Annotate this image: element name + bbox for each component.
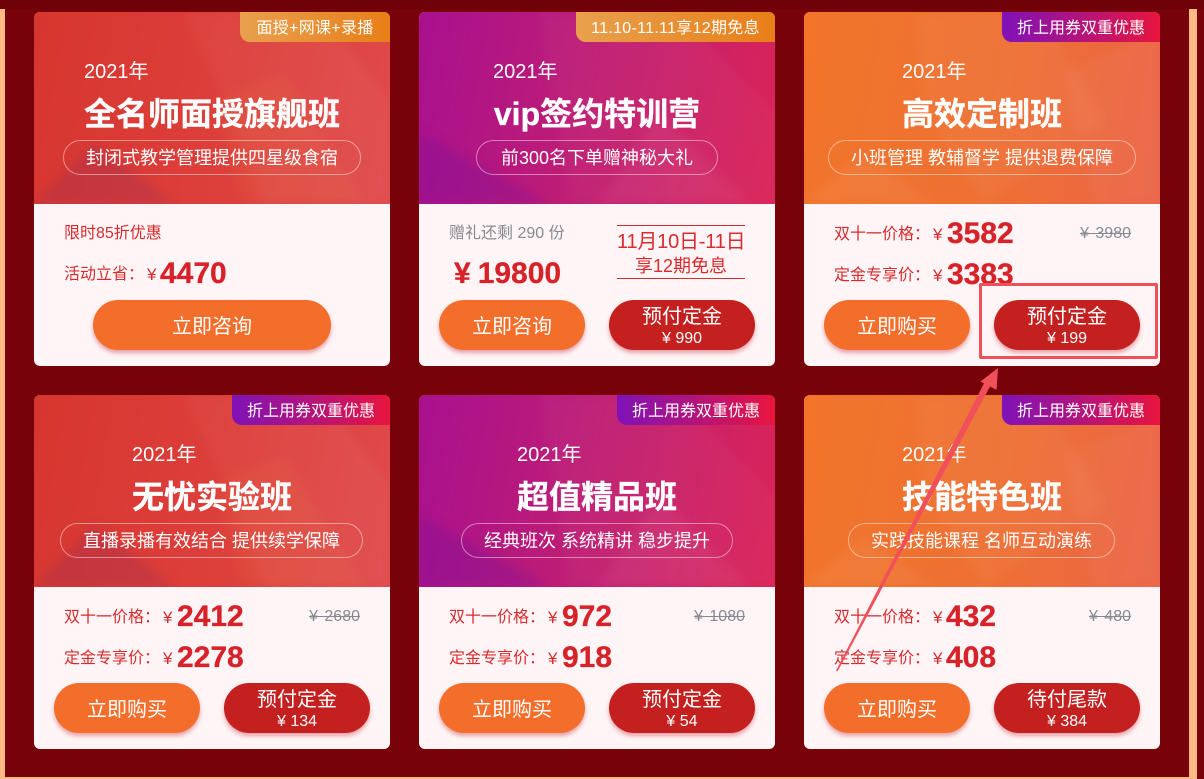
panel: vip签约特训营 [419,12,775,366]
deposit price label: 定金专享价： [834,261,930,285]
card header [34,395,390,587]
deposit price yen: ¥ [163,649,172,668]
button: deposit: ¥ 134 [277,713,317,730]
sale price: 972 [562,600,612,633]
savings label: 活动立省： [64,260,144,284]
card header [804,12,1160,204]
deposit price: 3383 [947,258,1014,291]
date range: 11月10日-11日 [617,231,745,253]
subtitle pill: 实践技能课程 名师互动演练 [871,531,1092,551]
button: buy [824,300,970,350]
left peach border [0,9,5,779]
sale price label: 双十一价格： [834,220,930,244]
button: deposit: 预付定金 [1027,306,1107,328]
button: deposit: ¥ 990 [662,330,702,347]
savings yen: ¥ [147,265,156,284]
year: 2021年 [902,61,966,83]
course title: 全名师面授旗舰班 [84,96,340,132]
right peach border [1189,9,1197,779]
course title: vip签约特训营 [494,96,700,132]
callout: highlight box [979,283,1158,359]
discount note: 限时85折优惠 [64,225,162,242]
panel: 全名师面授旗舰班 [34,12,390,366]
panel: 技能特色班 [804,395,1160,749]
savings amount: 4470 [160,257,227,290]
sale price: 2412 [177,600,244,633]
sale price: 3582 [947,217,1014,250]
button: buy [54,683,200,733]
sale price label: 双十一价格： [449,603,545,627]
year: 2021年 [517,444,582,466]
button: deposit [994,300,1140,350]
sale price yen: ¥ [548,608,557,627]
subtitle pill: 直播录播有效结合 提供续学保障 [83,531,340,551]
sale price yen: ¥ [163,608,172,627]
button: deposit: 预付定金 [642,689,722,711]
subtitle pill [476,140,718,175]
button: buy: 立即购买 [857,699,937,721]
deposit price label: 定金专享价： [834,644,930,668]
tag [1002,12,1160,42]
course title: 无忧实验班 [132,479,292,515]
installment text: 享12期免息 [635,256,727,276]
course title: 技能特色班 [902,479,1062,515]
card header [419,12,775,204]
button: balance [994,683,1140,733]
button: buy: 立即购买 [472,699,552,721]
button: deposit [224,683,370,733]
deposit price yen: ¥ [548,649,557,668]
button: buy: 立即购买 [87,699,167,721]
tag [1002,395,1160,425]
price: ¥19800 [454,257,561,290]
button: deposit: 预付定金 [257,689,337,711]
sale price yen: ¥ [933,225,942,244]
panel: 高效定制班 [804,12,1160,366]
card header [419,395,775,587]
year: 2021年 [902,444,966,466]
button: buy [824,683,970,733]
subtitle pill [63,140,361,175]
subtitle pill [828,140,1136,175]
tag: 折上用券双重优惠 [1017,20,1145,37]
sale price yen: ¥ [933,608,942,627]
button: deposit [609,683,755,733]
panel: 无忧实验班 [34,395,390,749]
tag [617,395,775,425]
button: consult [439,300,585,350]
original price: ¥ 480 [1089,608,1131,625]
subtitle pill: 封闭式教学管理提供四星级食宿 [86,148,338,168]
button: consult [93,300,331,350]
card header [34,12,390,204]
tag: 折上用券双重优惠 [632,403,760,420]
original price: ¥ 2680 [309,608,360,625]
tag: 折上用券双重优惠 [247,403,375,420]
sale price: 432 [946,600,996,633]
subtitle pill [461,523,733,558]
deposit price label: 定金专享价： [449,644,545,668]
button: buy: 立即购买 [857,316,937,338]
interest-free notice [617,225,745,279]
sale price label: 双十一价格： [64,603,160,627]
sale price label: 双十一价格： [834,603,930,627]
gift stock: 赠礼还剩 290 份 [449,225,565,242]
course title: 高效定制班 [902,96,1062,132]
button: buy [439,683,585,733]
tag [240,12,390,42]
deposit price: 918 [562,641,612,674]
year: 2021年 [132,444,196,466]
deposit price: 2278 [177,641,244,674]
deposit price label: 定金专享价： [64,644,160,668]
original price: ¥ 1080 [694,608,745,625]
deposit price yen: ¥ [933,649,942,668]
tag [576,12,775,42]
subtitle pill: 经典班次 系统精讲 稳步提升 [484,531,710,551]
card header [804,395,1160,587]
deposit price: 408 [946,641,996,674]
year: 2021年 [493,61,558,83]
deposit price yen: ¥ [933,266,942,285]
tag: 11.10-11.11享12期免息 [591,20,760,37]
tag [232,395,390,425]
subtitle pill: 小班管理 教辅督学 提供退费保障 [851,148,1113,168]
button: deposit: ¥ 199 [1047,330,1087,347]
button: deposit: ¥ 54 [666,713,698,730]
panel: 超值精品班 [419,395,775,749]
subtitle pill [848,523,1115,558]
button: deposit [609,300,755,350]
original price: ¥ 3980 [1080,225,1131,242]
bottom peach border [0,777,1197,779]
year: 2021年 [84,61,148,83]
button: deposit: 预付定金 [642,306,722,328]
button: consult: 立即咨询 [472,316,552,338]
tag: 面授+网课+录播 [256,20,374,37]
tag: 折上用券双重优惠 [1017,403,1145,420]
subtitle pill [60,523,363,558]
subtitle pill: 前300名下单赠神秘大礼 [501,148,693,168]
button: balance: 待付尾款 [1027,689,1107,711]
course title: 超值精品班 [517,479,677,515]
button: balance: ¥ 384 [1047,713,1087,730]
button: consult: 立即咨询 [172,316,252,338]
